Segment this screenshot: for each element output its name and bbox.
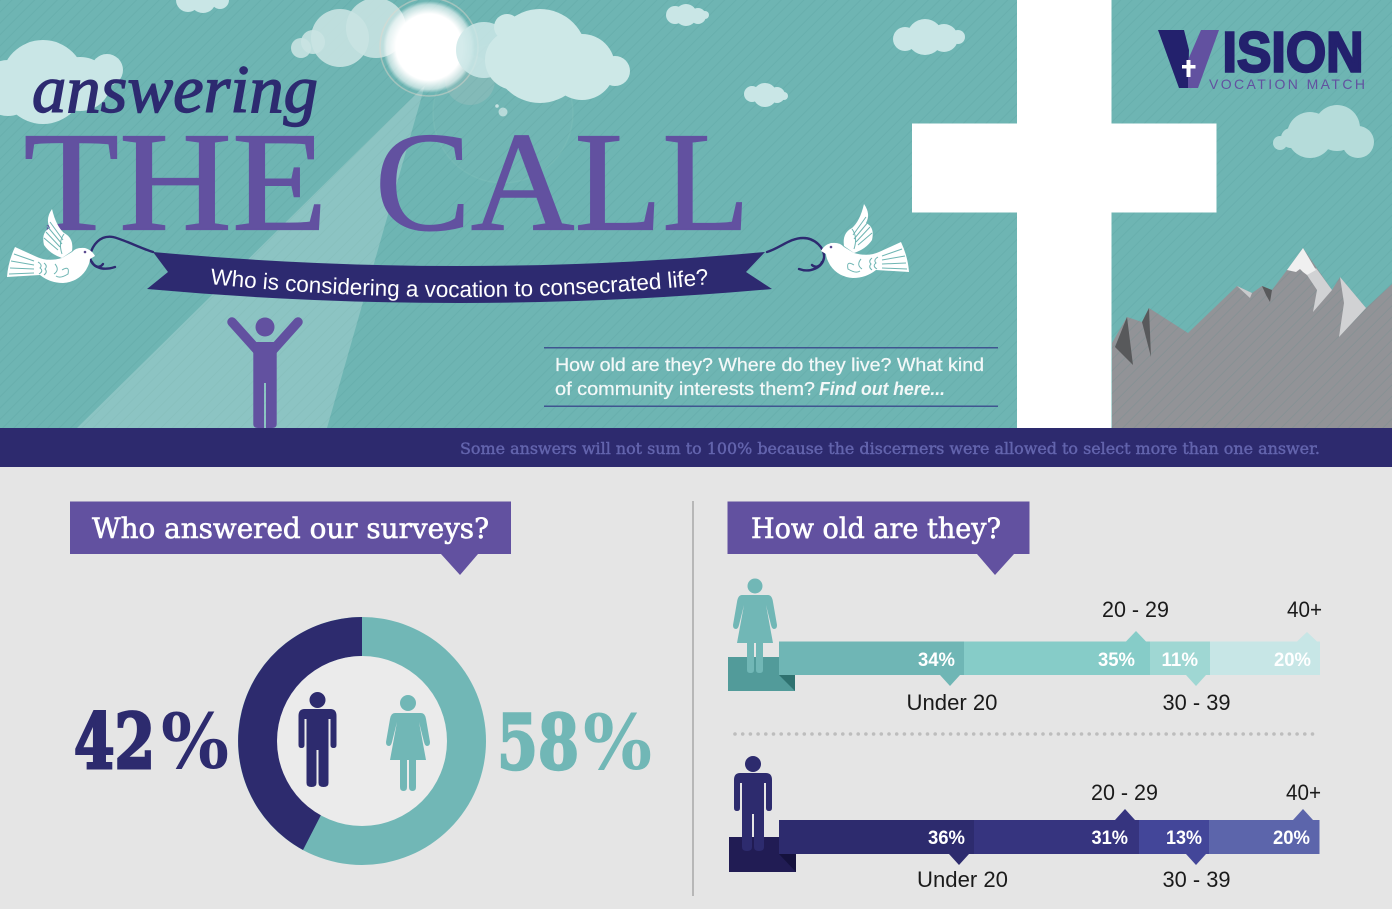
- cloud: small top: [666, 4, 709, 26]
- intro text block: of community interests them?: [555, 379, 815, 399]
- title: THE CALL: [24, 102, 750, 260]
- footnote band: [0, 428, 1392, 467]
- mountains: [1112, 248, 1392, 428]
- banner text: Who is considering a vocation to consecrated life?: [212, 268, 708, 301]
- dotted separator: [735, 732, 1319, 736]
- age labels: 30 - 39: [1162, 690, 1230, 715]
- cloud: left of sun: [291, 0, 406, 67]
- values: 20%: [1274, 650, 1311, 671]
- cross: [912, 0, 1216, 428]
- stat: 42%: [74, 697, 229, 786]
- segments: [779, 631, 1320, 686]
- title: answering: answering: [32, 51, 318, 127]
- age labels: 20 - 29: [1091, 780, 1158, 805]
- sky background: [0, 0, 1392, 428]
- age labels: 40+: [1286, 780, 1321, 805]
- age labels: [906, 597, 1322, 715]
- cloud: right: [1273, 105, 1374, 158]
- cloud: top edge: [176, 0, 229, 13]
- person with raised arms: [232, 318, 298, 428]
- icon: man: [734, 756, 772, 851]
- values: 31%: [1092, 828, 1128, 849]
- values: 20%: [1273, 828, 1310, 849]
- ribbon string: right: [767, 238, 824, 270]
- intro text block: Find out here...: [819, 379, 945, 399]
- values: 34%: [918, 650, 955, 671]
- stat: 42%: %: [161, 697, 229, 786]
- heading: who answered: [70, 502, 511, 575]
- age labels: 30 - 39: [1162, 867, 1230, 892]
- stat: 58%: [497, 698, 652, 787]
- stat: 42%: 42: [74, 697, 155, 786]
- age bar: men: [729, 756, 1321, 892]
- values: [918, 650, 1311, 671]
- light beam: [77, 85, 425, 428]
- intro text block: How old are they? Where do they live? What kind: [555, 355, 984, 375]
- segments: [779, 809, 1320, 865]
- age labels: Under 20: [917, 867, 1008, 892]
- donut chart: [238, 617, 486, 865]
- ribbon string: left: [90, 237, 153, 269]
- age labels: 20 - 29: [1102, 597, 1169, 622]
- banner ribbon: [147, 252, 772, 303]
- cloud: top left: [0, 40, 123, 124]
- icon: man: [298, 692, 336, 787]
- dove: right: [821, 204, 909, 278]
- logo tagline: VOCATION MATCH: [1209, 76, 1365, 92]
- heading: who answered: Who answered our surveys?: [92, 512, 489, 545]
- podium: [729, 837, 796, 872]
- stat: 58%: %: [583, 698, 652, 787]
- values: 13%: [1166, 828, 1202, 849]
- cloud: near cross: [893, 19, 965, 55]
- heading: how old: [728, 502, 1030, 575]
- heading: how old: How old are they?: [751, 512, 1001, 545]
- vertical divider: [692, 501, 694, 896]
- dove: left: [7, 209, 95, 283]
- logo wordmark: ISION: [1222, 20, 1364, 84]
- intro text block: [544, 347, 998, 407]
- title: THE CALL: CALL: [375, 102, 750, 260]
- age labels: [917, 780, 1321, 892]
- age bar: women: [728, 578, 1322, 715]
- logo mark V: [1158, 30, 1219, 88]
- sun: [380, 0, 478, 96]
- cloud: small middle: [744, 83, 788, 107]
- cloud: right of sun: [456, 9, 630, 103]
- logo: [1158, 20, 1365, 92]
- values: 36%: [928, 828, 965, 849]
- podium: [728, 657, 795, 691]
- values: 11%: [1162, 650, 1198, 671]
- lower panel background: [0, 467, 1392, 909]
- values: [928, 828, 1310, 849]
- title: THE CALL: THE: [24, 102, 328, 260]
- stat: 58%: 58: [497, 698, 579, 787]
- values: 35%: [1098, 650, 1135, 671]
- age labels: Under 20: [906, 690, 998, 715]
- footnote band: Some answers will not sum to 100% because the discerners were allowed to select more than one answer.: [460, 439, 1320, 458]
- icon: woman: [733, 578, 777, 673]
- icon: woman: [386, 695, 430, 791]
- age labels: 40+: [1287, 597, 1322, 622]
- lens flare: [433, 43, 573, 183]
